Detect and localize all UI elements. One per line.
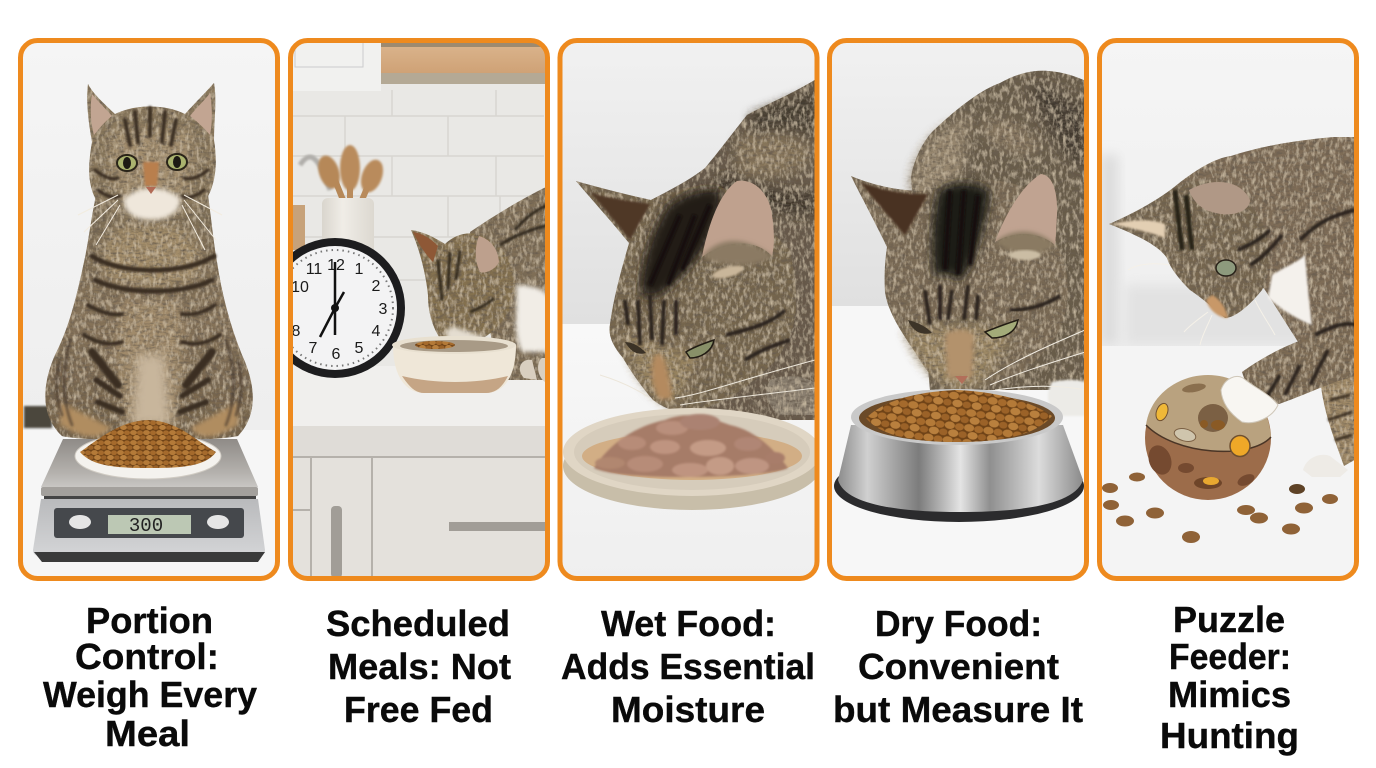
panel border 5 <box>1100 40 1356 578</box>
scale display: 300 <box>129 515 163 537</box>
plate of kibble <box>75 420 221 479</box>
caption: portion control: Meal <box>105 713 190 754</box>
caption: dry food: Convenient <box>858 646 1059 687</box>
caption: portion control: Weigh Every <box>43 674 257 715</box>
kitchen scale <box>33 439 265 562</box>
eating cat <box>411 186 550 384</box>
scale display <box>108 515 191 534</box>
clock numerals: 3 <box>379 301 388 318</box>
cat bowl <box>392 336 516 393</box>
clock numerals: 8 <box>292 323 301 340</box>
panel: portion control <box>20 40 280 580</box>
back leg <box>1303 375 1358 477</box>
forehead dark band <box>640 189 722 297</box>
sitting tabby cat <box>45 83 253 440</box>
white paw <box>1221 376 1278 423</box>
ear <box>702 181 774 257</box>
clock numerals: 2 <box>372 278 381 295</box>
caption: wet food: Adds Essential <box>561 646 815 687</box>
cat eating wet food <box>576 78 818 420</box>
caption: scheduled meals: Scheduled <box>326 603 510 644</box>
clock <box>293 238 405 378</box>
face <box>124 188 180 220</box>
caption: puzzle feeder: Puzzle <box>1173 599 1285 640</box>
forehead stripes <box>625 295 676 345</box>
playing cat <box>1109 137 1360 477</box>
panel: scheduled meals <box>293 43 545 576</box>
cat eating dry food <box>851 71 1090 416</box>
panel border 1 <box>20 40 278 578</box>
clock numerals: 6 <box>332 346 341 363</box>
panel border 4 <box>830 40 1086 578</box>
panel: puzzle feeder <box>1100 40 1360 580</box>
plate of wet food <box>563 408 821 510</box>
clock numerals <box>291 257 388 363</box>
utensil crock <box>293 144 384 250</box>
whiskers <box>78 195 222 250</box>
caption: dry food: but Measure It <box>833 689 1083 730</box>
caption: puzzle feeder <box>1160 599 1299 756</box>
clock numerals: 4 <box>372 323 381 340</box>
steel bowl with kibble <box>834 389 1084 522</box>
caption: dry food: Dry Food: <box>875 603 1042 644</box>
clock numerals: 10 <box>291 279 309 296</box>
caption: dry food <box>833 603 1083 730</box>
ear <box>995 174 1057 245</box>
scattered kibble <box>1102 472 1338 543</box>
eyes <box>625 342 646 354</box>
caption: scheduled meals: Free Fed <box>344 689 493 730</box>
counter <box>290 366 550 580</box>
panel border 2 <box>290 40 548 578</box>
caption: scheduled meals: Meals: Not <box>328 646 511 687</box>
wet food chunks <box>594 414 788 477</box>
panel border 3 <box>560 40 817 578</box>
panel: wet food <box>560 40 821 580</box>
clock numerals: 12 <box>327 257 345 274</box>
caption: puzzle feeder: Hunting <box>1160 715 1299 756</box>
forehead stripes <box>925 285 978 325</box>
clock numerals: 1 <box>355 261 364 278</box>
caption: puzzle feeder: Mimics <box>1168 674 1291 715</box>
inner ears <box>91 94 112 135</box>
clock numerals: 11 <box>306 261 322 278</box>
puzzle ball <box>1145 375 1271 500</box>
clock numerals: 7 <box>309 340 318 357</box>
fur stripes <box>57 108 241 425</box>
caption: portion control: Control: <box>75 636 219 677</box>
caption: portion control: Portion <box>86 600 213 641</box>
caption: puzzle feeder: Feeder: <box>1169 636 1291 677</box>
caption: wet food: Wet Food: <box>601 603 776 644</box>
panel: dry food <box>832 43 1084 522</box>
upper cabinet and shelf <box>291 41 547 91</box>
caption: portion control <box>43 600 257 754</box>
clock hands <box>320 262 344 337</box>
eyes <box>117 155 137 171</box>
eyes <box>908 320 932 334</box>
caption: wet food: Moisture <box>611 689 765 730</box>
caption: scheduled meals <box>326 603 511 730</box>
forehead dark band <box>932 182 990 280</box>
clock numerals: 5 <box>355 340 364 357</box>
caption: wet food <box>561 603 815 730</box>
